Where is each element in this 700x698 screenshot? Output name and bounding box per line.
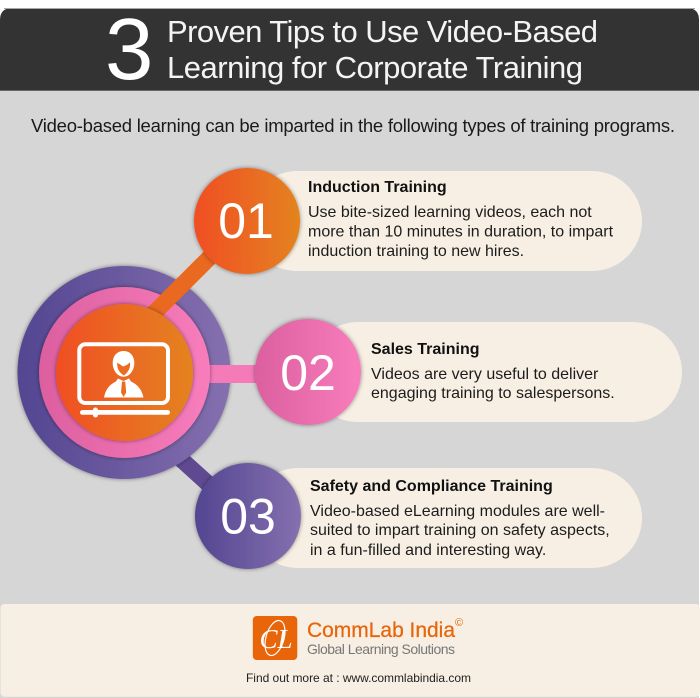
title: Proven Tips to Use Video-Based [167, 14, 598, 49]
title: Learning for Corporate Training [167, 50, 583, 85]
body 03: in a fun-filled and interesting way. [310, 542, 546, 559]
badge 02: 02 [280, 345, 336, 401]
connector: hub to 01 [145, 252, 215, 322]
badge 03: 03 [220, 488, 276, 544]
connector: hub to 03 [172, 451, 215, 490]
heading 02: Sales Training [371, 341, 479, 358]
body 01: Use bite-sized learning videos, each not [308, 204, 592, 221]
badge 01: 01 [218, 193, 274, 249]
panel: safety and compliance training [195, 463, 642, 569]
brand name: CommLab India [307, 619, 455, 642]
copyright mark: © [455, 617, 463, 629]
icon: CommLab logo [253, 616, 297, 660]
badge 01 [194, 168, 300, 274]
intro text: Video-based learning can be imparted in the following types of training programs. [31, 115, 675, 136]
pill 02 [308, 322, 682, 422]
panel: induction training [194, 168, 642, 274]
heading 03: Safety and Compliance Training [310, 478, 553, 495]
panel: sales training [255, 319, 682, 425]
body 01: more than 10 minutes in duration, to impart [308, 224, 614, 240]
pill 03 [248, 468, 642, 568]
heading 01: Induction Training [308, 179, 447, 196]
badge 02 [255, 319, 361, 425]
body 02: engaging training to salespersons. [371, 385, 615, 402]
pill 01 [247, 171, 642, 271]
website: Find out more at : www.commlabindia.com [246, 671, 471, 685]
header banner [0, 1, 699, 98]
central hub [18, 252, 260, 479]
icon: video player with presenter [79, 344, 170, 418]
body 03: Video-based eLearning modules are well- [310, 503, 605, 520]
body 01: induction training to new hires. [308, 243, 524, 260]
tagline: Global Learning Solutions [307, 641, 455, 657]
badge 03 [195, 463, 301, 569]
body 03: suited to impart training on safety aspects, [310, 522, 610, 539]
body 02: Videos are very useful to deliver [371, 366, 599, 383]
connector: hub to 02 [195, 365, 260, 383]
big number 3: 3 [105, 1, 153, 98]
footer [0, 604, 700, 697]
icon: CommLab logo: CL [260, 624, 293, 654]
